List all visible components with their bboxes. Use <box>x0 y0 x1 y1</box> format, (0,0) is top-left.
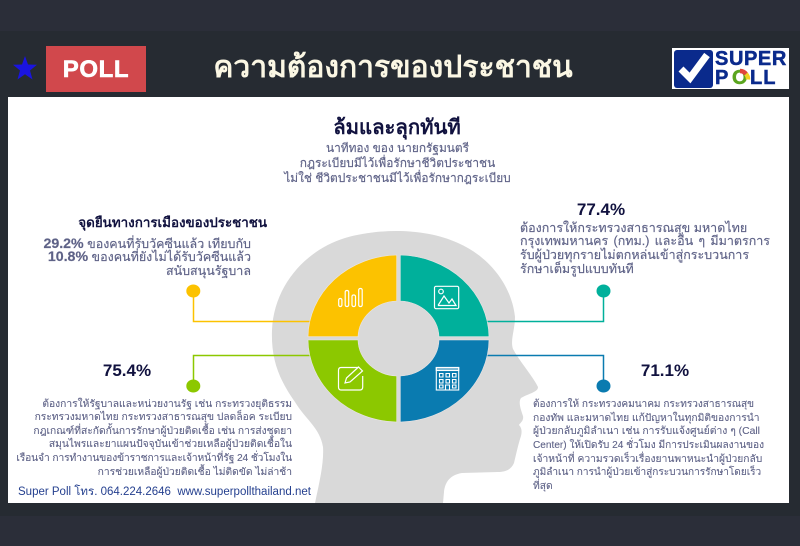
ring quadrant: green <box>308 340 397 422</box>
stat: 75.4%: 75.4% <box>103 361 151 380</box>
heading: main: ล้มและลุกทันที <box>333 117 461 139</box>
logo wordmark: SUPER: SUPER <box>715 48 787 70</box>
badge: POLL <box>46 46 146 92</box>
icon: star <box>13 56 37 80</box>
text: 75.4% description: ต้องการให้รัฐบาลและหน่วยงานรัฐ เช่น กระทรวงยุติธรรม <box>42 398 292 410</box>
text: political stance: 29.2% ของคนที่รับวัคซีนแล้ว เทียบกับ <box>43 236 251 252</box>
head silhouette <box>272 231 538 503</box>
text: subtitle <box>283 141 511 185</box>
logo: O ring colours <box>740 68 750 80</box>
text: political stance <box>43 235 251 278</box>
heading: political stance: จุดยืนทางการเมืองของประชาชน <box>78 215 267 230</box>
text: 71.1% description <box>533 398 764 492</box>
title: ความต้องการของประชาชน <box>213 51 573 84</box>
text: 75.4% description: กระทรวงมหาดไทย กระทรวงสาธารณสุข ปลดล็อค ระเบียบ <box>35 412 292 423</box>
icon: building <box>436 368 459 390</box>
connector lines <box>194 291 604 386</box>
logo: Super Poll <box>672 48 789 89</box>
text: 71.1% description: ต้องการให้ กระทรวงคมนาคม กระทรวงสาธารณสุข <box>533 399 754 410</box>
text: 77.4% description: ต้องการให้กระทรวงสาธารณสุข มหาดไทย <box>520 220 747 234</box>
text: 75.4% description: การช่วยเหลือผู้ป่วยติดเชื้อ ไม่ติดขัด ไม่ล่าช้า <box>98 467 292 478</box>
icon: picture <box>434 286 459 309</box>
text: 71.1% description: ที่สุด <box>533 481 553 492</box>
text: 71.1% description: กองทัพ และมหาดไทย แก้ปัญหาในทุกมิติของการนำ <box>533 413 760 424</box>
text: 71.1% description: เจ้าหน้าที่ ความรวดเร็วเรื่องยานพาหนะนำผู้ป่วยกลับ <box>533 454 762 465</box>
badge: POLL: POLL <box>63 56 129 83</box>
text: 71.1% description: ผู้ป่วยกลับภูมิลำเนา เช่น การรับแจ้งศูนย์ต่าง ๆ (Call <box>533 426 760 437</box>
stat: 77.4%: 77.4% <box>577 200 625 219</box>
panel: white content area <box>8 97 789 503</box>
ring quadrant: blue <box>400 340 489 422</box>
logo wordmark: POLL: P <box>715 67 728 89</box>
connector dots <box>186 284 611 392</box>
footer: contact: Super Poll โทร. 064.224.2646 www.superpollthailand.net <box>18 486 311 498</box>
text: 75.4% description: เรือนจำ การทำงานของข้าราชการและเจ้าหน้าที่รัฐ 24 ชั่วโมงใน <box>16 453 292 464</box>
text: 77.4% description: รักษาเต็มรูปแบบทันที <box>520 262 634 276</box>
ring quadrant: teal <box>400 255 489 337</box>
text: 71.1% description: Center) ให้เปิดรับ 24 ชั่วโมง มีการประเมินผลงานของ <box>533 440 764 451</box>
logo wordmark: POLL: O <box>732 67 748 89</box>
logo wordmark: POLL <box>715 67 776 89</box>
logo wordmark: POLL: LL <box>750 67 776 89</box>
text: 77.4% description: รับผู้ป่วยทุกรายไม่ตกหล่นเข้าสู่กระบวนการ <box>520 248 749 262</box>
text: 71.1% description: ภูมิลำเนา การนำผู้ป่วยเข้าสู่กระบวนการรักษาโดยเร็ว <box>533 467 761 478</box>
text: 77.4% description: กรุงเทพมหานคร (กทม.) และอื่น ๆ มีมาตรการ <box>520 234 770 248</box>
text: 75.4% description <box>16 398 292 478</box>
icon: check box <box>674 50 713 88</box>
ring quadrant: yellow <box>308 255 397 337</box>
text: political stance: 10.8% ของคนที่ยังไม่ได้รับวัคซีนแล้ว <box>48 249 251 265</box>
text: political stance: สนับสนุนรัฐบาล <box>166 264 251 278</box>
icon: pencil note <box>338 367 363 390</box>
icon: bar chart <box>339 288 362 306</box>
text: 75.4% description: สมุนไพรและยาแผนปัจจุบันเข้าช่วยเหลือผู้ป่วยติดเชื้อใน <box>49 439 292 450</box>
text: subtitle: นาทีทอง ของ นายกรัฐมนตรี <box>326 141 469 155</box>
text: 77.4% description <box>520 220 770 277</box>
text: subtitle: ไม่ใช่ ชีวิตประชาชนมีไว้เพื่อรักษากฎระเบียบ <box>284 171 511 185</box>
stat: 71.1%: 71.1% <box>641 361 689 380</box>
text: subtitle: กฎระเบียบมีไว้เพื่อรักษาชีวิตประชาชน <box>300 156 495 170</box>
text: 75.4% description: กฎเกณฑ์ที่สะกัดกั้นการรักษาผู้ป่วยติดเชื้อ เช่น การส่งชุดยา <box>33 426 292 437</box>
